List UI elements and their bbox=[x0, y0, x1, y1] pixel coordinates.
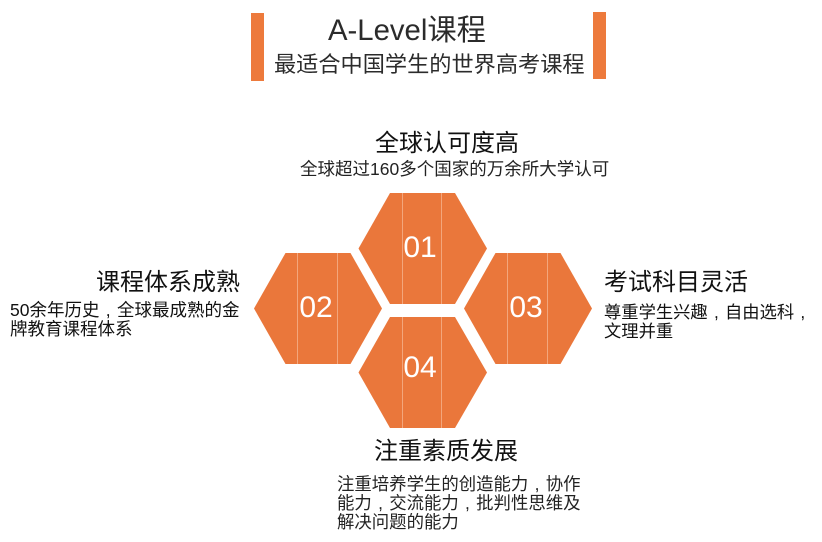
hexagon 01 bbox=[358, 193, 487, 304]
text 02: 50余年历史 全球最成熟的金 bbox=[10, 300, 239, 320]
text 03: , bbox=[714, 302, 719, 322]
hexagon 04 bbox=[358, 317, 487, 428]
text 03: 文理并重 bbox=[604, 320, 673, 340]
text 01: 全球超过160多个国家的万余所大学认可 bbox=[300, 159, 609, 179]
subtitle: 最适合中国学生的世界高考课程 bbox=[274, 52, 585, 77]
text 03: 尊重学生兴趣 自由选科 bbox=[604, 302, 794, 322]
heading 03: 考试科目灵活 bbox=[604, 269, 748, 296]
text 03: , bbox=[800, 302, 805, 322]
text 02: 牌教育课程体系 bbox=[10, 318, 132, 338]
header bbox=[251, 12, 606, 81]
text 02: , bbox=[106, 300, 111, 320]
right accent bar bbox=[593, 12, 606, 79]
title: A-Level课程 bbox=[328, 14, 486, 47]
block 01: global recognition bbox=[300, 130, 609, 179]
text 04: , bbox=[535, 474, 539, 494]
hexagon 02 bbox=[254, 253, 382, 364]
block 02: mature system bbox=[10, 269, 240, 338]
hexagon 04: 04 bbox=[403, 351, 437, 384]
hexagon 02: 02 bbox=[299, 291, 333, 324]
left accent bar bbox=[251, 13, 264, 81]
text 02 bbox=[10, 300, 239, 338]
heading 02: 课程体系成熟 bbox=[96, 269, 240, 296]
text 04: 解决问题的能力 bbox=[337, 512, 459, 532]
hexagon 01: 01 bbox=[403, 231, 437, 264]
text 04 bbox=[337, 474, 581, 532]
block 04: quality development bbox=[337, 438, 581, 532]
hexagon 03: 03 bbox=[509, 291, 543, 324]
text 04: , bbox=[378, 492, 383, 512]
heading 04: 注重素质发展 bbox=[374, 438, 518, 465]
text 04: 能力 交流能力 批判性思维及 bbox=[337, 492, 581, 512]
heading 01: 全球认可度高 bbox=[375, 130, 519, 157]
text 03 bbox=[604, 302, 805, 340]
text 04: 注重培养学生的创造能力 协作 bbox=[337, 474, 580, 494]
block 03: flexible subjects bbox=[604, 269, 805, 340]
hexagon 03 bbox=[464, 253, 592, 364]
text 04: , bbox=[465, 492, 470, 512]
